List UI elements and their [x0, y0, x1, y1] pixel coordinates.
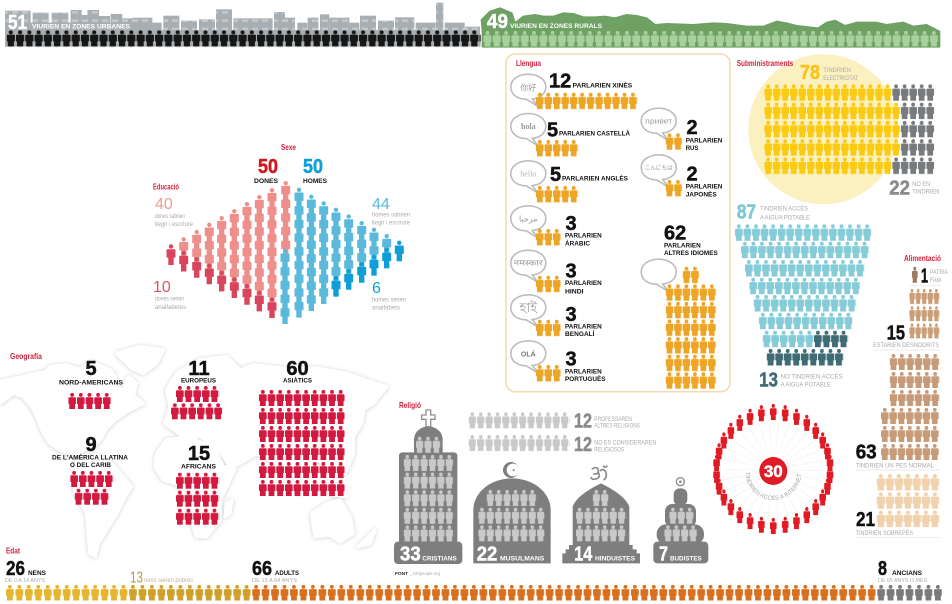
other languages: ALTRES IDIOMES — [664, 250, 718, 257]
Spanish — [511, 114, 630, 157]
people: adults — [252, 585, 877, 601]
label: 44 men literate: llegir i escriure — [372, 220, 411, 226]
Chinese: 12 — [549, 70, 571, 92]
label: 10 women illiterate — [153, 279, 186, 311]
panel: supplies — [735, 54, 939, 392]
panel: food — [855, 253, 948, 538]
label: 22 no electricity: TINDRIEN — [912, 189, 939, 195]
label: 78 electricity: TINDRIEN — [823, 68, 851, 74]
Arabic — [511, 206, 602, 248]
Hindi: 3 — [566, 260, 577, 282]
21 overweight: TINDRIEN SOBREPÈS — [856, 530, 913, 537]
label: 26 children: NENS — [28, 570, 47, 577]
label: 13 no water — [759, 370, 843, 392]
other languages — [641, 222, 718, 390]
label: 78 electricity: 78 — [800, 62, 820, 84]
Spanish: hola — [521, 122, 536, 131]
Japanese: PARLARIEN — [686, 184, 723, 191]
church: 33 Christians — [394, 410, 462, 566]
label: 66 adults: ADULTS — [275, 570, 300, 577]
Hindi — [511, 250, 602, 295]
label: 49 rural — [487, 11, 603, 33]
label: 10 women illiterate: analfabetes — [155, 305, 186, 311]
English: hello — [520, 169, 536, 178]
church: 33 Christians: CRISTIANS — [422, 556, 457, 563]
source — [395, 571, 440, 576]
label: 66 adults: DE 15 A 64 ANYS — [252, 578, 298, 584]
other religions row: ALTRES RELIGIONS — [594, 424, 640, 430]
15 undernourished — [873, 289, 940, 350]
1 starving: 1 — [921, 265, 928, 287]
heading: Alimentació: Alimentació — [904, 253, 941, 263]
label: 44 men literate: 44 — [372, 196, 390, 213]
label: 13 no water: A AIGUA POTABLE — [781, 383, 831, 389]
non religious row — [469, 434, 656, 456]
panel: religion — [394, 400, 708, 576]
21 overweight — [855, 474, 940, 538]
label: 10 women illiterate: dones serien — [155, 297, 184, 303]
label: 8 elderly: ANCIANS — [892, 570, 923, 577]
Russian: RUS — [686, 145, 699, 152]
Hindi: नमस्कार — [514, 259, 544, 268]
stupa: 7 Buddhists: BUDISTES — [670, 556, 702, 563]
label: 22 no electricity: NO EN — [912, 182, 930, 188]
Russian: привет — [645, 119, 673, 126]
Arabic: 3 — [566, 213, 577, 235]
21 overweight: 21 — [856, 509, 875, 531]
1 starving: PATRIA — [930, 270, 948, 276]
heading: Edat: Edat — [6, 546, 20, 556]
Arabic: PARLARIEN — [565, 233, 602, 240]
label: 87 water: A AIGUA POTABLE — [760, 215, 810, 221]
Africa — [176, 443, 219, 527]
label: 6 men illiterate: analfabets — [372, 306, 400, 312]
other religions row: 12 — [574, 411, 592, 433]
label: 40 women literate — [155, 196, 194, 228]
label: 8 elderly — [878, 558, 928, 584]
label: 10 women illiterate: 10 — [153, 279, 171, 296]
Spanish: 5 — [547, 120, 558, 142]
Europe: 11 — [188, 358, 210, 380]
Portuguese: PARLARIEN — [565, 368, 602, 375]
label: 22 no electricity: 22 — [889, 177, 910, 199]
Bengali: হাই — [519, 300, 538, 315]
panel: internet access ring — [713, 404, 834, 534]
label: 13 poor children — [130, 570, 193, 587]
label: 49 rural: 49 — [487, 11, 508, 33]
49 people — [484, 31, 939, 46]
heading: Geografia: Geografia — [10, 351, 42, 361]
panel frame — [506, 54, 730, 392]
panel: urban population strip — [5, 3, 481, 47]
label: 87 water: 87 — [737, 201, 756, 223]
Asia — [259, 358, 346, 496]
Latin America: O DEL CARIB — [70, 462, 111, 469]
world map — [0, 347, 387, 557]
label: 26 children: 26 — [6, 558, 25, 580]
Latin America: DE L'AMÈRICA LLATINA — [52, 452, 128, 462]
temple: 14 Hindus — [562, 466, 640, 566]
Japanese: こんにちは — [645, 165, 673, 172]
panel: age strip — [5, 546, 944, 601]
Russian — [641, 108, 723, 152]
Europe: EUROPEUS — [181, 378, 217, 384]
label: 6 men illiterate — [372, 280, 406, 312]
Bengali: PARLARIEN — [565, 323, 602, 330]
Latin America: 9 — [85, 434, 97, 456]
63 normal weight — [855, 354, 940, 470]
Africa: AFRICANS — [181, 464, 217, 470]
other religions row — [469, 411, 640, 433]
Africa: 15 — [188, 443, 210, 465]
Chinese — [511, 70, 638, 110]
heading: Sexe: Sexe — [281, 142, 296, 152]
label: 8 elderly: DE 65 ANYS O MÉS — [878, 577, 928, 584]
heading: Llengua: Llengua — [516, 58, 541, 68]
panel: sex and education — [153, 142, 411, 324]
heading: Religió: Religió — [399, 400, 421, 410]
hills — [482, 8, 939, 47]
label: 13 no water: 13 — [759, 370, 778, 392]
label: 49 rural: VIURIEN EN ZONES RURALS — [510, 23, 603, 30]
non religious row: 12 — [574, 434, 592, 456]
15 undernourished: 15 — [887, 322, 905, 344]
label: 44 men literate: homes sabrien — [372, 212, 410, 218]
Chinese: 你好 — [520, 82, 536, 92]
spokes — [741, 438, 805, 502]
label: 40 women literate: llegir i escriure — [155, 222, 194, 228]
1 starving — [909, 265, 948, 287]
Arabic: مرحبا — [519, 214, 538, 223]
label: 22 no electricity — [889, 177, 939, 199]
stupa: 7 Buddhists: 7 — [659, 544, 668, 566]
label: 50 men: 50 — [303, 156, 323, 178]
people: children not poor — [6, 585, 129, 601]
Japanese — [641, 155, 723, 199]
51 people — [7, 30, 481, 47]
Asia: 60 — [286, 358, 309, 380]
label: 6 men illiterate: homes serien — [372, 298, 406, 304]
heading: Educació: Educació — [153, 182, 179, 192]
mosque: 22 Muslims: MUSULMANS — [500, 556, 545, 563]
label: 78 electricity: ELECTRICITAT — [823, 76, 859, 82]
Portuguese: OLÁ — [521, 349, 536, 358]
label: 50 women — [254, 156, 279, 185]
label: 50 men: HOMES — [303, 178, 328, 185]
Russian: 2 — [686, 117, 698, 139]
other religions row: PROFESSAREN — [594, 417, 632, 423]
stupa: 7 Buddhists — [653, 478, 708, 566]
63 normal weight: 63 — [856, 441, 877, 463]
other languages: PARLARIEN — [664, 242, 701, 249]
curved label: TINDRIEN ACCÉS A INTERNET — [746, 472, 802, 500]
diamond chart of people — [166, 181, 404, 324]
skyline — [5, 3, 480, 47]
label: 13 poor children: nens serien pobres — [144, 578, 193, 584]
label: 66 adults: 66 — [252, 558, 272, 580]
temple: 14 Hindus: HINDUISTES — [595, 556, 636, 563]
label: 51 urban: VIURIEN EN ZONES URBANES — [32, 23, 131, 30]
label: 26 children — [5, 558, 47, 584]
water funnel: access — [735, 224, 872, 348]
Arabic: ÀRABIC — [565, 239, 590, 248]
label: 26 children: DE 0 A 14 ANYS — [5, 578, 46, 584]
label: 87 water: TINDRIEN ACCÉS — [760, 206, 808, 213]
label: 44 men literate — [372, 196, 411, 226]
Asia: ASIÀTICS — [283, 376, 313, 384]
Europe — [171, 358, 223, 420]
ring of 30 people — [713, 404, 833, 534]
63 normal weight: TINDRIEN UN PES NORMAL — [856, 463, 935, 469]
English — [511, 161, 629, 203]
non religious row: NO ES CONSIDERAREN — [594, 441, 656, 447]
label: 87 water — [737, 201, 810, 223]
Bengali — [511, 295, 602, 338]
non religious row: RELIGIOSOS — [594, 448, 624, 454]
North America: 5 — [85, 358, 97, 380]
label: 6 men illiterate: 6 — [372, 280, 381, 297]
Spanish: PARLARIEN CASTELLÀ — [559, 129, 630, 138]
label: 51 urban: 51 — [8, 12, 27, 34]
label: 8 elderly: 8 — [878, 558, 887, 580]
Portuguese: PORTUGUÈS — [565, 374, 606, 383]
label: 66 adults — [252, 558, 300, 584]
label: 51 urban — [8, 12, 131, 34]
people: poor children — [129, 585, 252, 601]
label: 13 poor children: 13 — [130, 570, 143, 587]
temple: 14 Hindus: 14 — [574, 544, 593, 566]
Japanese: 2 — [686, 164, 698, 186]
centre badge 30: 30 — [764, 462, 783, 481]
church: 33 Christians: 33 — [400, 544, 421, 566]
Portuguese: 3 — [566, 349, 577, 371]
Chinese: PARLARIEN XINÈS — [573, 80, 633, 89]
1 starving: FAM — [930, 278, 941, 284]
other languages: 62 — [664, 222, 686, 244]
yellow circle — [748, 54, 898, 204]
panel: geography — [0, 347, 387, 557]
label: 50 women: 50 — [258, 156, 278, 178]
label: 50 men — [303, 156, 328, 185]
mosque: 22 Muslims — [473, 462, 551, 566]
people: elderly — [877, 585, 944, 601]
label: 40 women literate: dones sabrien — [155, 214, 185, 220]
electricity people: grey — [892, 84, 935, 176]
Bengali: 3 — [566, 304, 577, 326]
North America — [59, 358, 124, 410]
Russian: PARLARIEN — [686, 137, 723, 144]
source: _100people.org — [409, 571, 440, 576]
panel: language — [506, 54, 730, 392]
Portuguese — [511, 341, 606, 383]
source: FONT — [395, 571, 408, 576]
15 undernourished: ESTARIEN DESNODRITS — [873, 343, 939, 349]
North America: NORD-AMERICANS — [59, 380, 124, 386]
Latin America — [52, 434, 128, 505]
panel: rural population strip — [482, 8, 939, 47]
water funnel: no access — [767, 331, 848, 366]
mosque: 22 Muslims: 22 — [477, 544, 497, 566]
heading: Subministraments: Subministraments — [737, 58, 793, 68]
electricity people: yellow — [764, 84, 901, 176]
label: 78 electricity — [800, 62, 859, 84]
Japanese: JAPONÈS — [686, 190, 717, 199]
label: 13 no water: NO TINDRIEN ACCÉS — [781, 373, 843, 380]
Hindi: HINDI — [565, 288, 584, 295]
label: 40 women literate: 40 — [155, 196, 173, 213]
Hindi: PARLARIEN — [565, 280, 602, 287]
Bengali: BENGALÍ — [565, 329, 595, 338]
English: 5 — [550, 164, 561, 186]
English: PARLARIEN ANGLÈS — [562, 173, 629, 182]
label: 50 women: DONES — [254, 178, 279, 185]
